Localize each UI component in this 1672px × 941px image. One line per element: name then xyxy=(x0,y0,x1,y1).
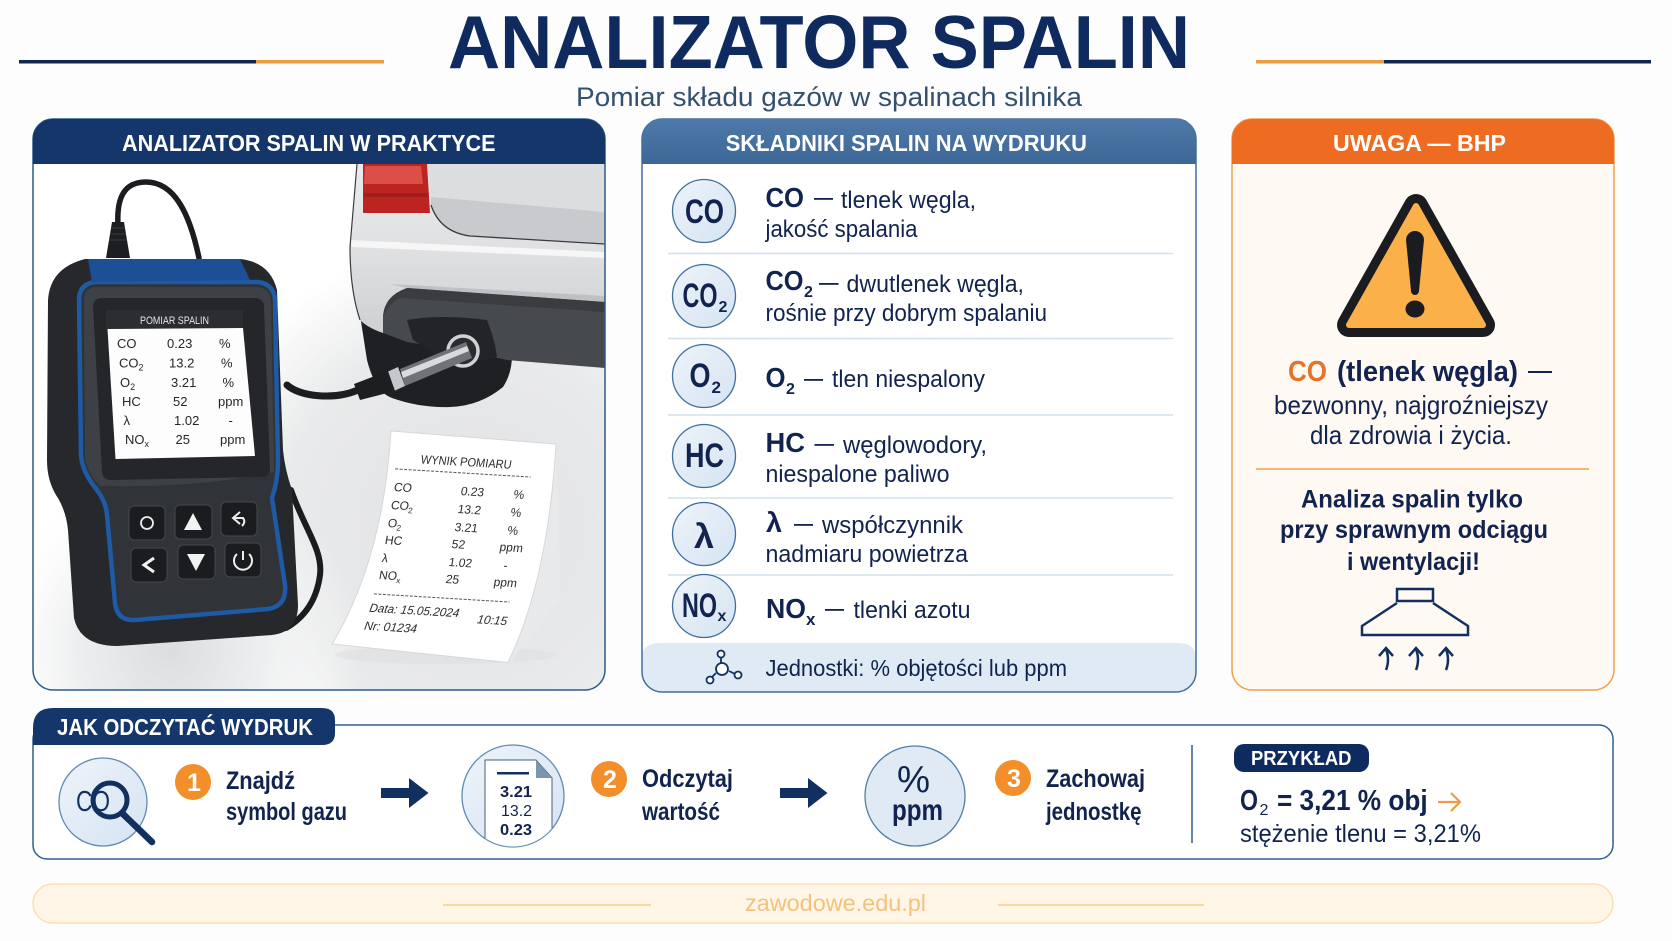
device screen: 2 xyxy=(130,382,135,392)
receipt: Data: 15.05.2024 xyxy=(368,601,461,620)
step 1 text: symbol gazu xyxy=(226,798,347,826)
icon: magnifier over CO: CO xyxy=(76,786,110,818)
receipt: λ xyxy=(381,551,389,565)
row NOx: tlenki azotu xyxy=(854,597,970,624)
panel: analizator spalin w praktyce xyxy=(33,119,605,690)
sampling probe and hose xyxy=(287,342,472,400)
receipt: ppm xyxy=(493,575,518,590)
panel: jak odczytać wydruk xyxy=(33,708,1613,860)
icon: document with values: 13.2 xyxy=(501,803,532,820)
device screen: 25 xyxy=(176,432,190,447)
receipt: 1.02 xyxy=(448,555,474,570)
receipt xyxy=(332,431,561,664)
device screen: 1.02 xyxy=(174,413,199,428)
device screen: 3.21 xyxy=(171,375,196,390)
row O2: 2 xyxy=(712,378,721,397)
device screen: 13.2 xyxy=(169,356,194,370)
panel: składniki spalin xyxy=(642,119,1196,692)
step 2 badge: 2 xyxy=(603,766,617,794)
row O2: 2 xyxy=(786,381,795,398)
receipt: % xyxy=(509,505,523,520)
receipt: HC xyxy=(384,533,404,548)
icon: units: % xyxy=(897,759,930,801)
exhaust tip xyxy=(448,336,478,366)
units band xyxy=(642,643,1196,692)
device screen: 2 xyxy=(138,362,144,372)
arrow 1 xyxy=(381,778,428,808)
device screen: HC xyxy=(122,394,141,409)
row lambda: λ xyxy=(766,507,782,538)
row O2: O xyxy=(766,362,786,393)
receipt: - xyxy=(502,558,509,573)
handheld analyzer xyxy=(47,259,298,646)
units note: Jednostki: % objętości lub ppm xyxy=(766,655,1067,681)
device screen: % xyxy=(221,356,233,370)
receipt: % xyxy=(506,523,520,538)
row NOx: NO xyxy=(766,593,806,624)
row CO2: dwutlenek węgla, xyxy=(846,271,1024,298)
panel heading: ANALIZATOR SPALIN W PRAKTYCE xyxy=(122,130,496,156)
step 1 text xyxy=(226,767,347,826)
receipt: 2 xyxy=(396,524,402,533)
row HC: HC xyxy=(766,427,805,458)
step 3 badge xyxy=(995,760,1031,796)
row O2: tlen niespalony xyxy=(832,366,985,393)
device screen: - xyxy=(228,413,233,428)
row HC xyxy=(672,424,987,488)
receipt: 3.21 xyxy=(454,520,479,535)
orange arrow xyxy=(1438,793,1460,811)
panel frame xyxy=(642,119,1196,692)
device screen: 52 xyxy=(173,394,187,409)
device screen: NO xyxy=(125,432,144,447)
row HC: HC xyxy=(685,437,724,475)
device screen: ppm xyxy=(220,432,245,447)
row CO2: 2 xyxy=(804,284,813,301)
receipt: 13.2 xyxy=(457,502,483,517)
row CO2 xyxy=(672,264,1047,328)
cable strain relief xyxy=(106,222,130,258)
receipt: Nr: 01234 xyxy=(363,619,418,636)
row CO2: rośnie przy dobrym spalaniu xyxy=(766,300,1047,327)
panel: uwaga BHP xyxy=(1232,119,1614,690)
row lambda: nadmiaru powietrza xyxy=(766,541,969,568)
device buttons xyxy=(129,502,261,582)
row lambda: λ xyxy=(694,518,714,556)
example formula: O xyxy=(1240,785,1258,817)
device screen: % xyxy=(222,375,234,390)
receipt: ppm xyxy=(499,540,524,555)
device screen: 0.23 xyxy=(167,336,192,351)
device screen: O xyxy=(120,375,130,390)
footer band: zawodowe.edu.pl xyxy=(745,890,926,916)
receipt: % xyxy=(513,487,526,502)
step 3 badge: 3 xyxy=(1007,765,1021,793)
row CO: CO xyxy=(685,193,724,231)
ventilation text xyxy=(1280,486,1548,576)
row NOx: x xyxy=(718,608,726,625)
header rule left xyxy=(19,60,384,64)
device screen xyxy=(106,310,255,459)
row NOx: NO xyxy=(682,587,717,625)
step 3 text: jednostkę xyxy=(1045,798,1142,826)
row CO2: 2 xyxy=(718,299,728,316)
receipt: 52 xyxy=(451,537,467,552)
row CO: CO xyxy=(766,182,804,213)
icon: units xyxy=(865,746,965,846)
receipt: CO xyxy=(390,498,410,513)
example badge: PRZYKŁAD xyxy=(1251,748,1352,770)
row NOx: x xyxy=(806,610,816,629)
ventilation text: przy sprawnym odciągu xyxy=(1280,516,1548,544)
device screen: % xyxy=(219,336,231,351)
receipt: 2 xyxy=(407,506,414,515)
panel header xyxy=(33,119,605,164)
row NOx xyxy=(672,574,970,638)
footer band xyxy=(33,884,1613,923)
car wheel xyxy=(360,315,512,407)
device screen: CO xyxy=(119,356,138,370)
row HC: węglowodory, xyxy=(842,432,987,459)
row O2: O xyxy=(690,357,710,395)
device cables xyxy=(118,182,320,628)
icon: document with values xyxy=(462,745,564,860)
row HC: niespalone paliwo xyxy=(766,461,950,488)
icon: extraction hood xyxy=(1362,589,1468,670)
photo scene xyxy=(33,164,605,690)
panel header xyxy=(1232,119,1614,164)
row CO: tlenek węgla, xyxy=(841,187,976,214)
ventilation text: Analiza spalin tylko xyxy=(1301,486,1523,514)
header rule right xyxy=(1256,60,1651,64)
tab heading xyxy=(33,708,335,745)
device screen: x xyxy=(144,439,150,449)
row CO xyxy=(672,180,976,243)
row lambda: współczynnik xyxy=(821,512,964,539)
device screen: λ xyxy=(124,413,130,428)
step 2 badge xyxy=(591,761,627,797)
receipt: 0.23 xyxy=(460,484,486,499)
tab heading: JAK ODCZYTAĆ WYDRUK xyxy=(57,713,313,740)
icon: units: ppm xyxy=(892,794,943,827)
icon: document with values: 0.23 xyxy=(500,822,532,839)
ventilation text: i wentylacji! xyxy=(1347,548,1480,576)
row CO2: CO xyxy=(766,265,804,296)
row CO2: CO xyxy=(682,277,718,315)
subtitle: Pomiar składu gazów w spalinach silnika xyxy=(576,82,1083,112)
step 2 text: Odczytaj xyxy=(642,765,733,793)
example formula: = 3,21 % obj xyxy=(1277,785,1428,817)
row CO: jakość spalania xyxy=(765,216,918,243)
warning text xyxy=(1274,356,1552,450)
step 1 text: Znajdź xyxy=(226,767,295,795)
receipt: NO xyxy=(378,568,398,583)
receipt: 25 xyxy=(445,572,461,587)
panel frame xyxy=(33,119,605,690)
example badge xyxy=(1234,744,1369,772)
step 2 text: wartość xyxy=(641,798,720,826)
icon: document with values: 3.21 xyxy=(500,784,532,801)
receipt: 10:15 xyxy=(476,612,509,628)
car body xyxy=(350,164,605,368)
step 2 text xyxy=(641,765,733,826)
icon: molecule xyxy=(706,650,742,684)
icon: magnifier over CO xyxy=(59,758,152,846)
row lambda xyxy=(672,502,969,568)
title: ANALIZATOR SPALIN xyxy=(448,0,1190,84)
warning text: CO xyxy=(1288,356,1327,388)
receipt: O xyxy=(387,516,398,531)
device screen: ppm xyxy=(218,394,243,409)
example formula: 2 xyxy=(1260,802,1268,819)
receipt: x xyxy=(396,576,401,585)
step 1 badge xyxy=(175,764,211,800)
example formula xyxy=(1240,785,1428,819)
warning text: dla zdrowia i życia. xyxy=(1310,420,1512,450)
step 3 text xyxy=(1045,765,1145,826)
icon: warning triangle xyxy=(1349,206,1483,325)
device screen: POMIAR SPALIN xyxy=(140,315,209,327)
example note: stężenie tlenu = 3,21% xyxy=(1240,820,1481,848)
warning text: (tlenek węgla) xyxy=(1337,356,1518,388)
panel heading: SKŁADNIKI SPALIN NA WYDRUKU xyxy=(726,130,1087,156)
device screen: CO xyxy=(117,336,136,351)
receipt: WYNIK POMIARU xyxy=(420,452,513,472)
step 3 text: Zachowaj xyxy=(1046,765,1145,793)
row O2 xyxy=(672,344,985,408)
panel heading: UWAGA — BHP xyxy=(1333,130,1506,156)
receipt: CO xyxy=(393,480,413,495)
arrow 2 xyxy=(780,778,828,808)
step 1 badge: 1 xyxy=(187,769,201,797)
warning text: bezwonny, najgroźniejszy xyxy=(1274,390,1548,420)
panel header xyxy=(642,119,1196,164)
